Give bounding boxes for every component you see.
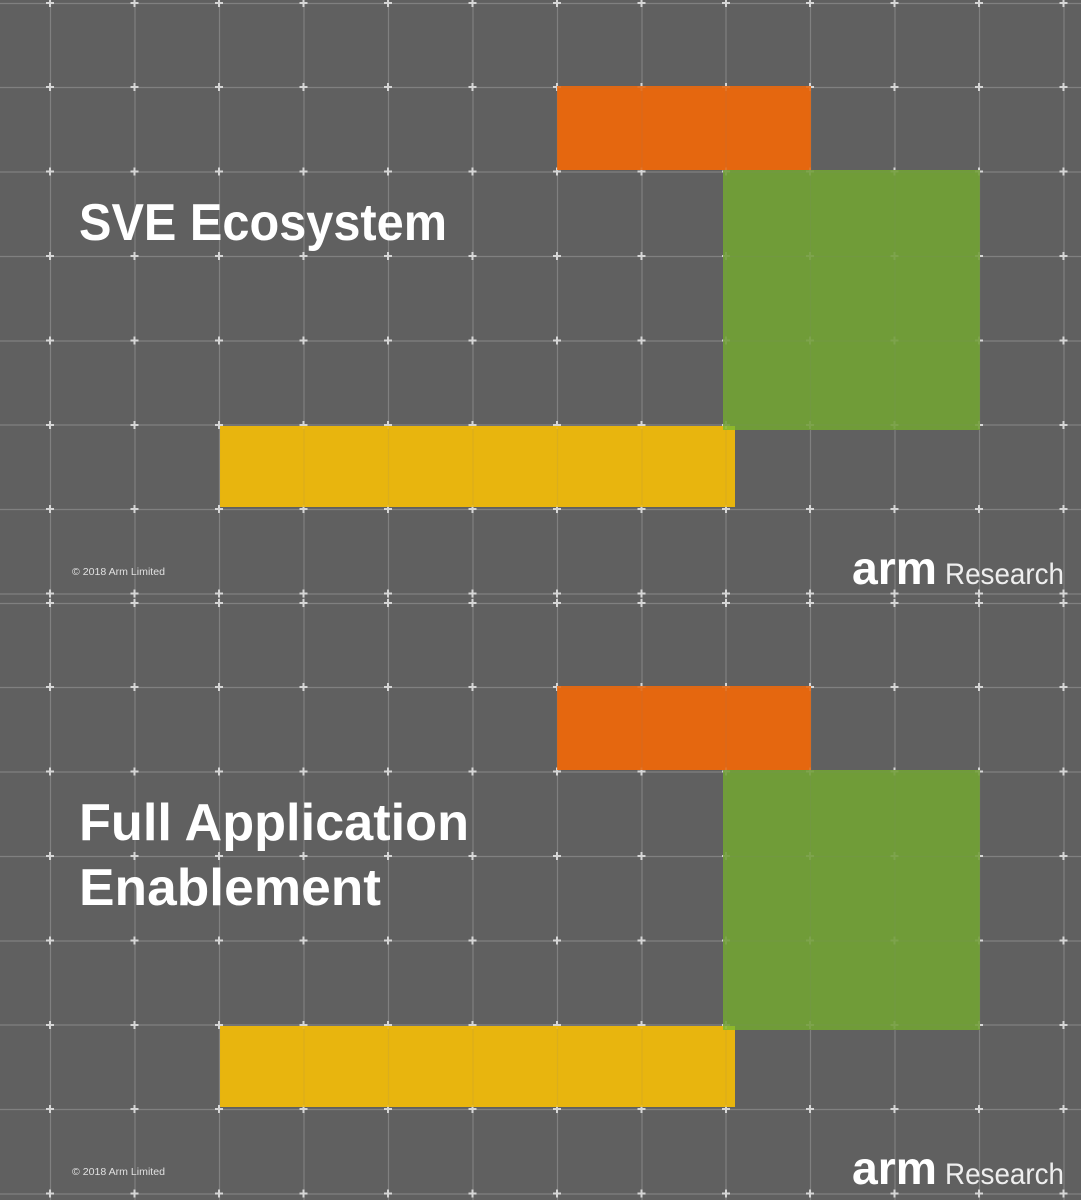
yellow block [220, 426, 735, 507]
logo: arm Research [852, 1142, 1064, 1194]
logo: arm Research [852, 542, 1064, 594]
green and yellow overlap [723, 1026, 735, 1030]
logo: arm Research: arm [852, 1142, 937, 1194]
logo: arm Research: Research [945, 558, 1064, 591]
logo: arm Research: Research [945, 1158, 1064, 1191]
copyright: © 2018 Arm Limited [72, 567, 165, 578]
orange block [557, 86, 811, 170]
yellow block [220, 1026, 735, 1107]
green and yellow overlap [723, 426, 735, 430]
panel: Full Application Enablement [0, 599, 1081, 1200]
title [79, 794, 469, 917]
orange block [557, 686, 811, 770]
panel: SVE Ecosystem [0, 0, 1081, 600]
title: SVE Ecosystem [79, 194, 447, 252]
logo: arm Research: arm [852, 542, 937, 594]
green block [723, 170, 980, 430]
title: Full Application [79, 794, 469, 852]
title: Enablement [79, 859, 381, 917]
copyright: © 2018 Arm Limited [72, 1167, 165, 1178]
green block [723, 770, 980, 1030]
